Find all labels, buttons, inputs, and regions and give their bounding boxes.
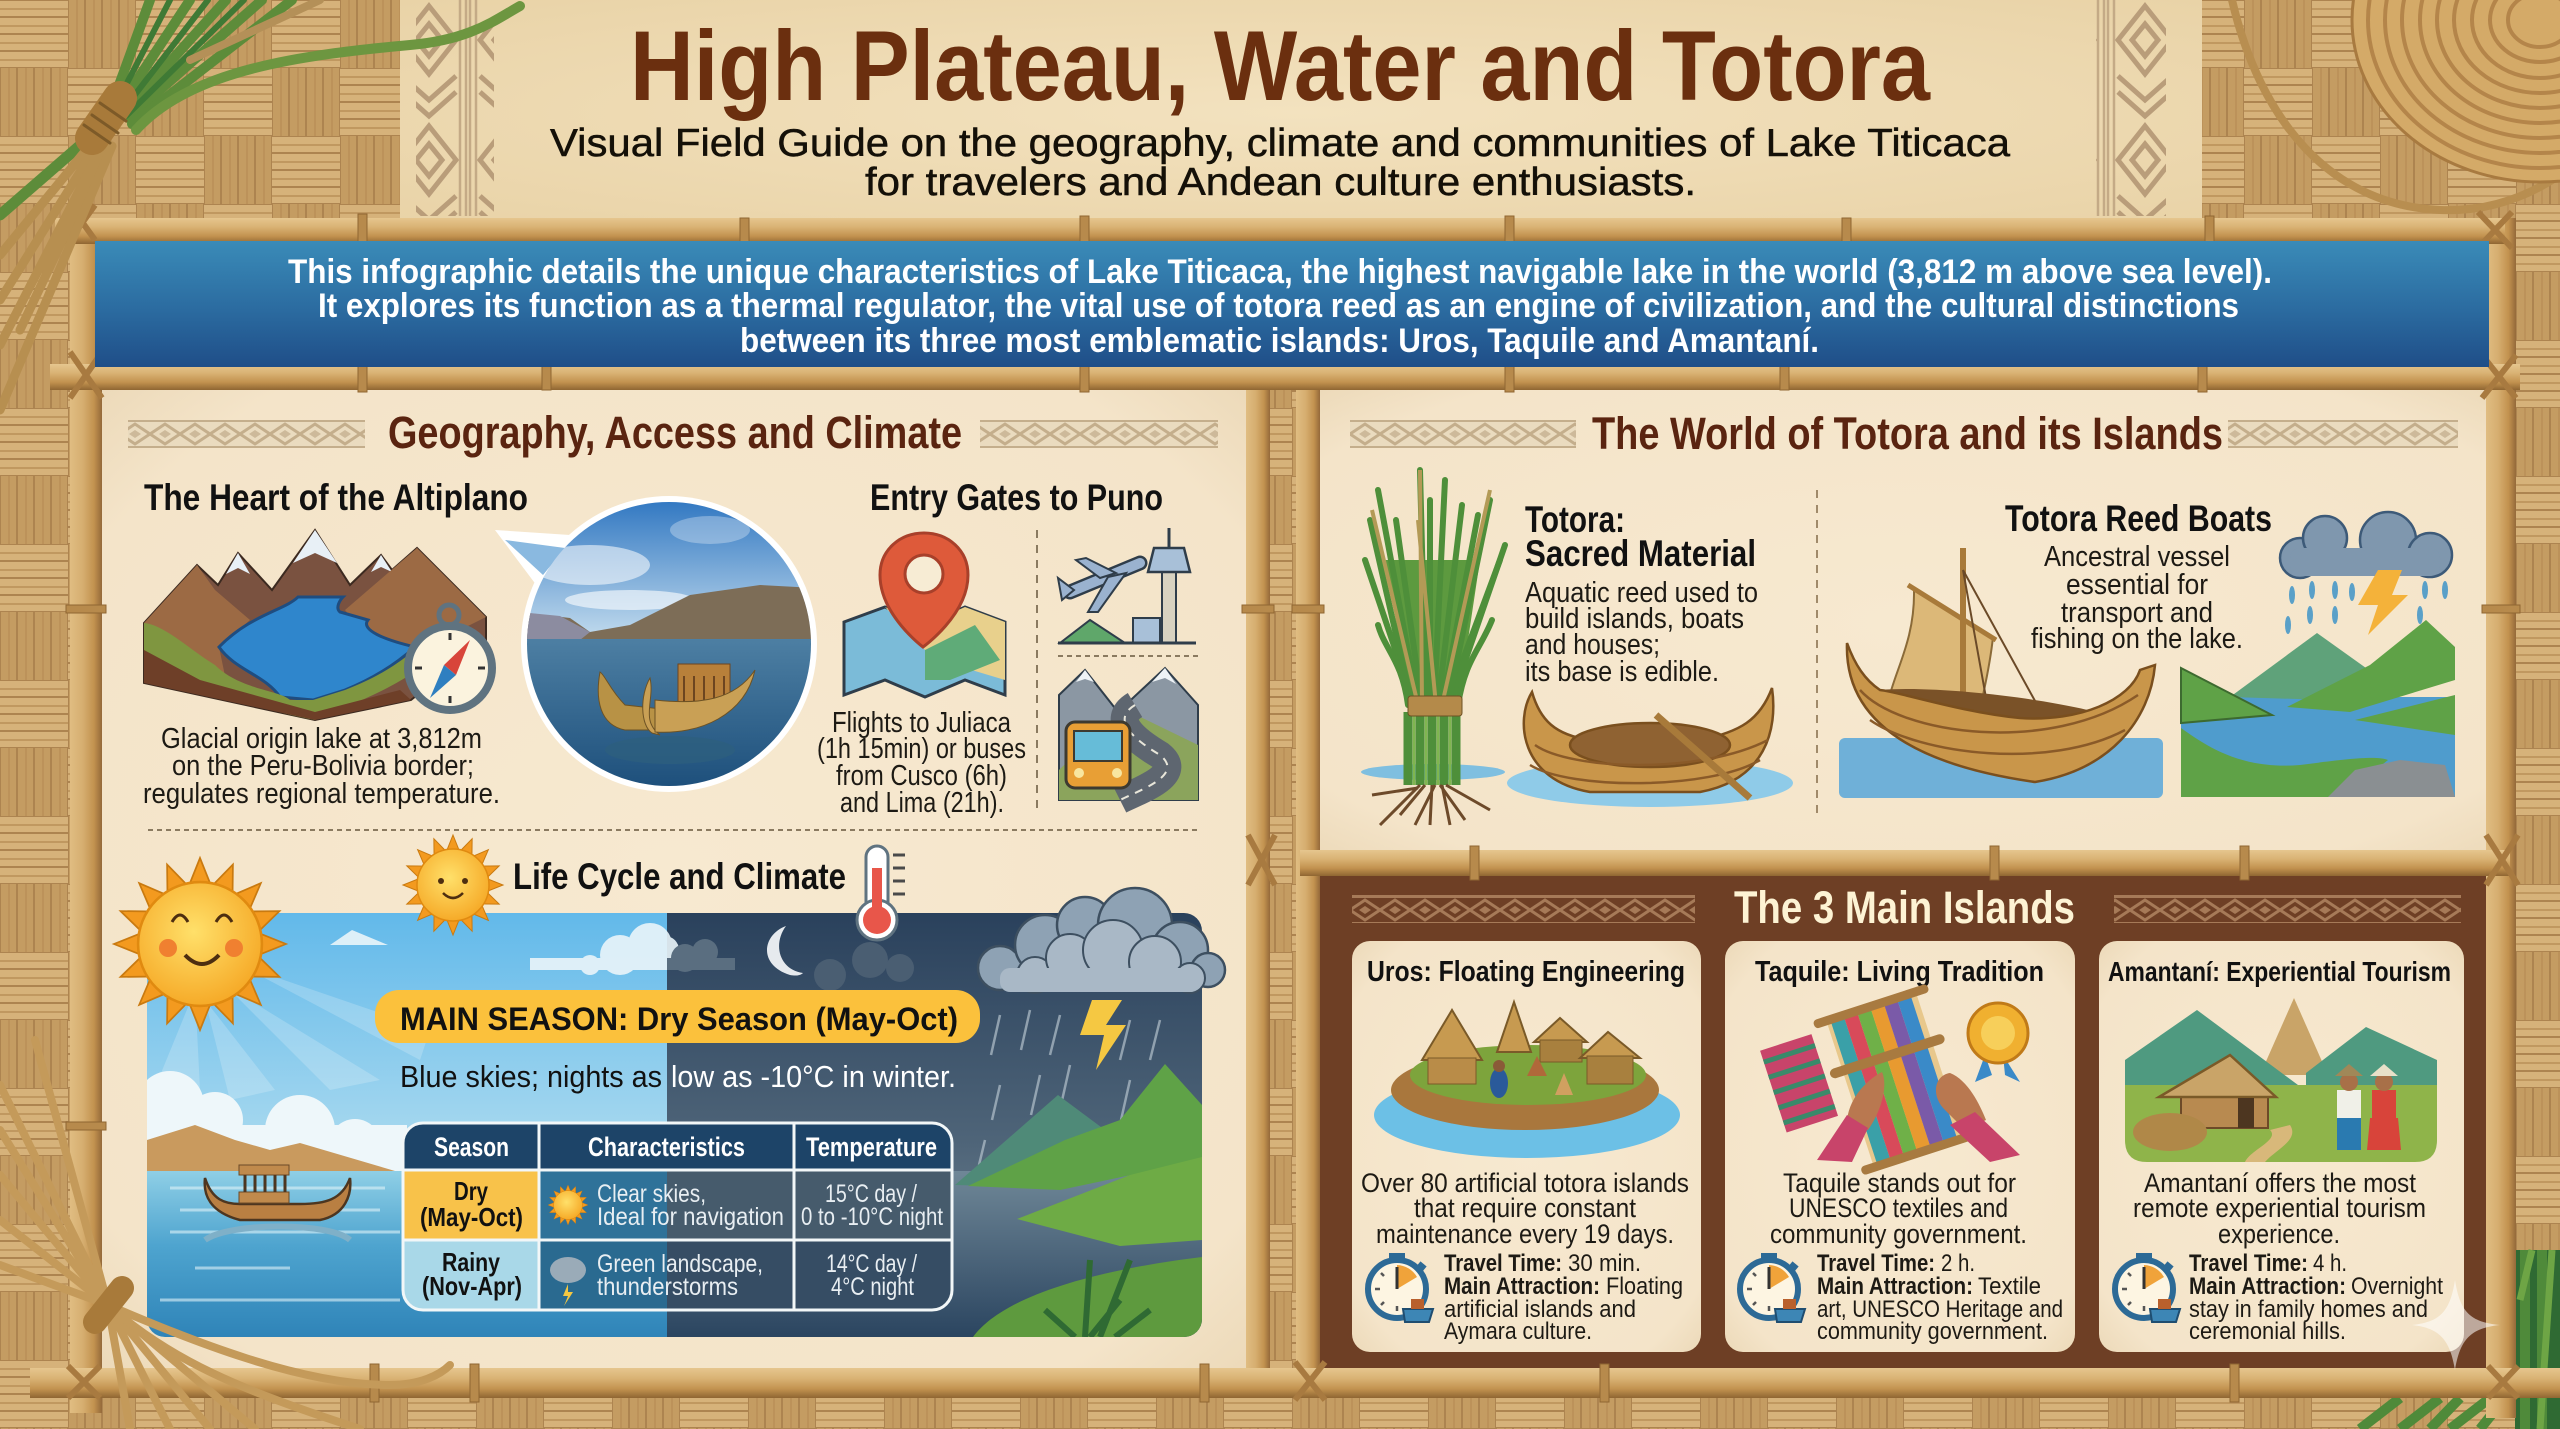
card title: Uros: Floating Engineering (1367, 956, 1685, 988)
banner: intro text: It explores its function as a thermal regulator, the vital use of totora reed as an engine of civilization, and the cultural distinctions (318, 287, 2239, 325)
section: life cycle and climate (107, 831, 1225, 1337)
row: rainy: 4°C night (831, 1273, 914, 1301)
text: uros details: Floating (1606, 1273, 1683, 1300)
icon: reed bundle top left (0, 0, 520, 410)
heading: world of totora: The World of Totora and its Islands (1592, 408, 2223, 459)
text: blue skies note: low as -10°C in winter. (671, 1059, 956, 1094)
icon: reed bundle bottom left (0, 1040, 450, 1429)
text: flights and buses: from Cusco (6h) (836, 760, 1007, 792)
panel: header parchment (400, 0, 2202, 225)
icon: plane and tower (1058, 528, 1196, 643)
icon: mountain lake (144, 530, 486, 720)
text: uros description: Over 80 artificial totora islands (1361, 1168, 1689, 1198)
banner: intro text: between its three most emblematic islands: Uros, Taquile and Amantaní. (740, 322, 1819, 360)
text: taquile details: art, UNESCO Heritage and (1817, 1296, 2063, 1323)
text: flights and buses: (1h 15min) or buses (817, 733, 1026, 765)
panel: geography, access and climate (107, 407, 1225, 1337)
text: taquile details: Travel Time: (1817, 1250, 1935, 1277)
row: rainy: 14°C day / (826, 1250, 917, 1278)
icon: big reed boat (1839, 548, 2163, 798)
icon: amantani village (2125, 998, 2437, 1162)
text: totora sacred material: build islands, boats (1525, 603, 1744, 635)
text: totora reed boats: Totora Reed Boats (2005, 498, 2272, 539)
subheading: heart of the altiplano: The Heart of the Altiplano (144, 477, 528, 518)
text: totora sacred material: and houses; (1525, 629, 1660, 661)
banner: intro text (95, 241, 2489, 367)
text: amantani details: Overnight (2351, 1273, 2443, 1300)
text: taquile details: community government. (1817, 1318, 2048, 1345)
icon: road and bus (1059, 668, 1198, 800)
text: amantani description: Amantaní offers the most (2144, 1168, 2416, 1198)
heading band left (128, 420, 365, 448)
left panel parchment (98, 385, 1250, 1370)
pill: main season (375, 990, 980, 1043)
dotted separator (148, 829, 1200, 831)
card title: Taquile: Living Tradition (1755, 956, 2044, 988)
text: totora reed boats: Ancestral vessel (2044, 541, 2230, 573)
text: uros details: Main Attraction: (1444, 1273, 1600, 1300)
heading: geography: Geography, Access and Climate (388, 407, 962, 458)
icon: small sun (399, 831, 507, 939)
row: rainy: thunderstorms (597, 1273, 738, 1301)
icon: floating island (1374, 1002, 1680, 1158)
icon: travel timer (1368, 1253, 1433, 1322)
card title: Amantaní: Experiential Tourism (2108, 956, 2451, 987)
text: amantani details: stay in family homes and (2189, 1296, 2428, 1323)
photo: lake with reed boats (495, 495, 820, 792)
climate scene (136, 913, 1202, 1337)
right top panel parchment (1318, 385, 2490, 860)
text: amantani details: ceremonial hills. (2189, 1318, 2346, 1345)
text: totora sacred material: Sacred Material (1525, 533, 1756, 574)
icon: map pin (844, 533, 1005, 697)
text: blue skies note: Blue skies; nights as (400, 1059, 662, 1094)
text: totora sacred material: Aquatic reed used to (1525, 577, 1758, 609)
icon: compass (408, 605, 492, 710)
card: amantani (2099, 941, 2464, 1352)
icon: travel timer (1740, 1253, 1805, 1322)
card: taquile (1725, 941, 2075, 1352)
table header (434, 1132, 937, 1162)
text: uros description: that require constant (1414, 1193, 1636, 1223)
row: dry: 15°C day / (825, 1180, 917, 1208)
row: rainy: Green landscape, (597, 1250, 763, 1278)
icon: storm cloud (978, 888, 1225, 1070)
row: dry: Dry (454, 1176, 488, 1206)
text: glacial origin: Glacial origin lake at 3,812m (161, 723, 482, 755)
icon: loom and medal (1760, 983, 2028, 1176)
text: amantani details (2189, 1250, 2443, 1345)
text: taquile description (1770, 1168, 2027, 1249)
text: taquile details: Main Attraction: (1817, 1273, 1973, 1300)
dashed divider (1036, 530, 1038, 812)
row: rainy: Rainy (442, 1247, 500, 1277)
text: flights and buses: Flights to Juliaca (832, 707, 1012, 739)
text: taquile details: 2 h. (1941, 1250, 1975, 1277)
text: taquile description: Taquile stands out for (1783, 1168, 2016, 1198)
heading: life cycle: Life Cycle and Climate (513, 856, 846, 897)
dashed divider (1816, 490, 1818, 820)
icon: totora reed bundle (1361, 470, 1505, 825)
row: dry: Ideal for navigation (597, 1203, 784, 1231)
dotted divider (1058, 655, 1198, 657)
text: totora sacred material: Totora: (1525, 499, 1625, 540)
text: amantani details: 4 h. (2313, 1250, 2347, 1277)
watermark star (2412, 1280, 2500, 1370)
text: uros details: artificial islands and (1444, 1296, 1636, 1323)
heading band right (980, 420, 1218, 448)
table header: Season (434, 1132, 509, 1162)
text: amantani description: experience. (2218, 1219, 2340, 1249)
text: totora sacred material: its base is edible. (1525, 656, 1719, 688)
text: totora sacred material (1525, 499, 1758, 688)
icon: storm over lake landscape (2181, 512, 2455, 797)
table: seasons (403, 1123, 952, 1310)
pill: main season: MAIN SEASON: Dry Season (May-Oct) (400, 1001, 958, 1037)
text: taquile details: Textile (1978, 1273, 2041, 1300)
row: rainy (422, 1247, 917, 1306)
row: dry (420, 1176, 943, 1232)
text: taquile description: community government. (1770, 1219, 2027, 1249)
panel: world of totora (1350, 408, 2458, 825)
text: amantani details: Travel Time: (2189, 1250, 2308, 1277)
text: totora reed boats: transport and (2061, 597, 2213, 629)
table header: Temperature (806, 1132, 937, 1162)
subtitle (550, 122, 2010, 204)
title: High Plateau, Water and Totora (630, 10, 1931, 121)
subheading: entry gates: Entry Gates to Puno (870, 477, 1163, 518)
text: uros details: Aymara culture. (1444, 1318, 1592, 1345)
icon: coiled basket top right (2232, 0, 2560, 210)
row: rainy: (Nov-Apr) (422, 1271, 522, 1301)
text: blue skies note (400, 1059, 956, 1094)
text: glacial origin: on the Peru-Bolivia border; (172, 750, 474, 782)
heading band left (1352, 895, 1695, 923)
row: dry: Clear skies, (597, 1180, 706, 1208)
icon: travel timer (2115, 1253, 2180, 1322)
text: flights and buses (817, 707, 1026, 819)
heading: 3 main islands: The 3 Main Islands (1734, 882, 2075, 933)
icon: big smiling sun (107, 851, 293, 1037)
row: dry: (May-Oct) (420, 1202, 523, 1232)
text: glacial origin: regulates regional temperature. (143, 778, 500, 810)
text: glacial origin (143, 723, 500, 810)
panel: the 3 main islands (1352, 882, 2464, 1352)
right side green reeds (2360, 1250, 2560, 1429)
heading band right (2114, 895, 2461, 923)
text: uros description (1361, 1168, 1689, 1249)
table header: Characteristics (588, 1132, 745, 1162)
text: taquile description: UNESCO textiles and (1789, 1193, 2008, 1223)
text: uros details (1444, 1250, 1683, 1345)
text: flights and buses: and Lima (21h). (840, 787, 1004, 819)
text: uros details: 30 min. (1568, 1250, 1641, 1277)
text: totora reed boats (2005, 498, 2272, 655)
text: totora reed boats: essential for (2066, 569, 2208, 601)
text: amantani details: Main Attraction: (2189, 1273, 2346, 1300)
text: amantani description (2133, 1168, 2426, 1249)
subtitle: Visual Field Guide on the geography, climate and communities of Lake Titicaca (550, 122, 2010, 165)
text: taquile details (1817, 1250, 2063, 1345)
banner: intro text: This infographic details the unique characteristics of Lake Titicaca, the highest navigable lake in the world (3,812 m above sea level). (288, 253, 2272, 291)
heading band left (1350, 420, 1576, 448)
heading band right (2228, 420, 2458, 448)
text: uros details: Travel Time: (1444, 1250, 1562, 1277)
subtitle: for travelers and Andean culture enthusiasts. (865, 161, 1696, 204)
right bottom panel brown (1318, 872, 2490, 1372)
card: uros (1352, 941, 1701, 1352)
text: amantani description: remote experiential tourism (2133, 1193, 2426, 1223)
text: totora reed boats: fishing on the lake. (2031, 623, 2243, 655)
row: dry: 0 to -10°C night (801, 1203, 943, 1231)
text: uros description: maintenance every 19 days. (1376, 1219, 1674, 1249)
icon: small reed boat with oar (1507, 688, 1793, 807)
icon: thermometer (857, 846, 905, 940)
